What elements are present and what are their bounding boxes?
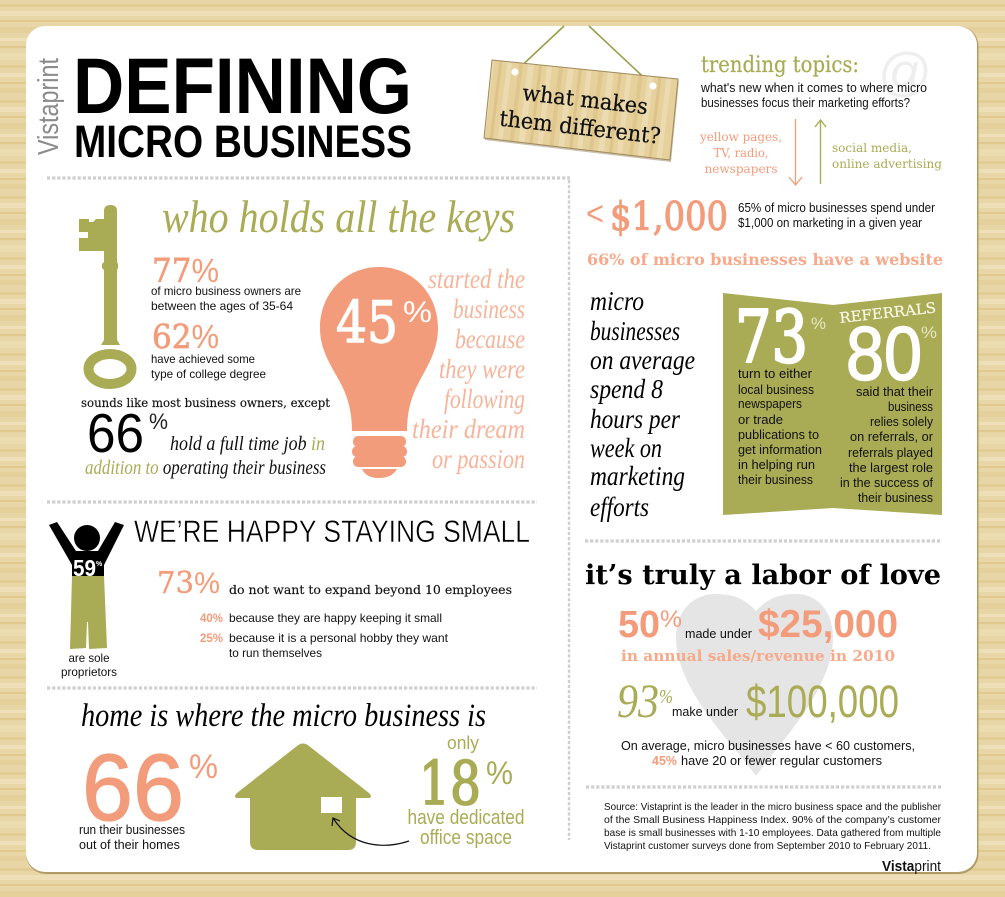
marketing hours script: [590, 286, 695, 522]
dream text: they were: [439, 354, 525, 384]
stat: 50% under $25,000: %: [660, 606, 682, 633]
stat: 73% local papers: in helping run: [738, 458, 815, 472]
stat: 73% local papers: turn to either: [738, 367, 812, 381]
stat: 80% referrals: in the success of: [840, 476, 934, 490]
stat: 66% full time job: hold a full time job in: [170, 433, 325, 455]
arrow: to office window: [332, 818, 409, 845]
stat: 66% full time job: 66: [87, 402, 144, 464]
stat: under $1,000: $1,000 on marketing in a given year: [738, 216, 922, 230]
stat: 50% under $25,000: in annual sales/revenue in 2010: [621, 647, 895, 665]
dream text: business: [453, 294, 525, 324]
stat: under $1,000: <: [586, 195, 604, 233]
icon: person with raised arms: [49, 522, 124, 649]
stat: 80% referrals: their business: [858, 491, 933, 505]
brand: Vistaprint logo: Vistaprint: [882, 858, 942, 875]
heading: it’s truly a labor of love: [585, 560, 941, 591]
stat: 80% referrals: said that their: [856, 385, 933, 399]
stat: 66% full time job: [81, 396, 330, 479]
marketing hours script: hours per: [590, 404, 680, 434]
panel: who holds all the keys: [79, 191, 525, 479]
icon: person with raised arms: %: [96, 561, 103, 568]
marketing hours script: on average: [590, 345, 695, 375]
stat: 73% local papers: get information: [738, 443, 822, 457]
declining channels: newspapers: [704, 162, 778, 176]
stat: 45%: %: [403, 296, 432, 329]
customers note: have 20 or fewer regular customers: [681, 753, 882, 768]
marketing hours script: spend 8: [590, 374, 663, 404]
stat: 80% referrals: %: [921, 323, 937, 342]
stat: 73%: [157, 566, 512, 601]
reason: 25%: to run themselves: [229, 646, 322, 660]
stat: 62%: type of college degree: [151, 367, 266, 381]
reason: 40%: because they are happy keeping it small: [229, 611, 442, 625]
caption: sole proprietors: are sole: [68, 651, 110, 665]
stat: 77%: of micro business owners are: [151, 284, 301, 298]
declining channels: [699, 130, 782, 176]
icon: heart: [676, 594, 833, 776]
stat: 50% under $25,000: [618, 603, 898, 665]
stat: 73% local papers: 73: [735, 295, 808, 379]
arrow: down: [789, 119, 802, 185]
stat: 93% under $100,000: %: [659, 686, 673, 708]
title: DEFINING: DEFINING: [73, 41, 412, 130]
dream text: [412, 264, 525, 474]
stat: 73% local papers: [735, 295, 826, 487]
icon: at sign: @: [878, 43, 932, 102]
growing channels: online advertising: [832, 157, 942, 171]
stat: 73% local papers: their business: [738, 473, 813, 487]
stat: 18%: [408, 733, 524, 849]
stat: 50% under $25,000: 50: [618, 604, 660, 646]
source note: Source: Vistaprint is the leader in the micro business space and the publisher: [604, 801, 941, 813]
stat: 62%: 62%: [152, 317, 219, 356]
stat: 18%: 18: [419, 749, 481, 819]
stat: 62%: have achieved some: [151, 352, 255, 366]
reason: 40%: 40%: [200, 613, 223, 625]
arrow: up: [815, 120, 826, 184]
marketing hours script: businesses: [590, 316, 680, 346]
stat: 73% local papers: %: [811, 314, 826, 333]
sign text: what makes: [521, 81, 649, 120]
stat: 80% referrals: REFERRALS: [839, 300, 937, 327]
panel: labor of love: [585, 560, 941, 776]
stat: 18%: %: [486, 755, 513, 791]
stat: 93% under $100,000: make under: [672, 704, 739, 719]
stat: 18%: only: [447, 733, 479, 753]
title block: [33, 41, 412, 167]
declining channels: yellow pages,: [699, 130, 782, 144]
dream text: or passion: [432, 444, 525, 474]
title: MICRO BUSINESS: MICRO BUSINESS: [74, 116, 412, 167]
sign text: them different?: [498, 107, 662, 150]
customers note: 45%: [652, 753, 677, 768]
trending description: businesses focus their marketing efforts?: [701, 96, 910, 110]
stat: 80% referrals: relies solely: [870, 415, 934, 429]
stat: 80% referrals: [839, 300, 937, 505]
customers note: [621, 738, 915, 768]
stat: 80% referrals: the largest role: [849, 461, 933, 475]
stat: 66% full time job: sounds like most business owners, except: [81, 396, 330, 410]
source note: of the Small Business Happiness Index. 90% of the company’s customer: [604, 814, 941, 826]
trending description: [700, 81, 927, 110]
dream text: because: [455, 324, 525, 354]
reason: 25%: because it is a personal hobby they want: [229, 631, 449, 645]
stat: 80% referrals: on referrals, or: [850, 430, 933, 444]
customers note: On average, micro businesses have < 60 customers,: [621, 738, 915, 753]
stat: 93% under $100,000: 93: [617, 675, 659, 728]
green folded banner: [723, 293, 942, 515]
stat: 50% under $25,000: made under: [685, 626, 753, 641]
source note: base is small businesses with 1-10 employees. Data gathered from multiple: [604, 827, 941, 839]
trending topics: [699, 43, 942, 185]
dream text: following: [444, 384, 525, 414]
caption: sole proprietors: [61, 651, 117, 679]
hanging wooden sign: [484, 26, 679, 162]
stat: 66% at home: 66: [82, 735, 184, 841]
stat: 73%: do not want to expand beyond 10 employees: [229, 583, 512, 597]
stat: 80% referrals: business: [888, 400, 933, 414]
caption: sole proprietors: proprietors: [61, 665, 117, 679]
sign text: [498, 79, 665, 150]
dream text: started the: [428, 264, 525, 294]
source note: Vistaprint customer surveys done from September 2010 to February 2011.: [604, 840, 931, 852]
reason: 25%: [200, 631, 449, 660]
dream text: their dream: [412, 414, 525, 444]
heading: trending topics: trending topics:: [701, 53, 859, 78]
stat: 80% referrals: referrals played: [848, 446, 933, 460]
declining channels: TV, radio,: [714, 146, 768, 160]
stat: 66% at home: %: [189, 748, 218, 786]
stat: 66% at home: [79, 735, 218, 852]
stat: 77%: [151, 251, 301, 313]
stat: 73% local papers: or trade: [738, 413, 783, 427]
stat: 73% local papers: local business: [738, 383, 814, 397]
panel: home is where the micro business is: [79, 698, 524, 852]
reason: 25%: 25%: [200, 633, 223, 645]
growing channels: social media,: [832, 141, 912, 155]
marketing hours script: marketing: [590, 461, 685, 491]
panel: we're happy staying small: [49, 513, 530, 679]
stat: 18%: office space: [420, 827, 512, 849]
heading: WE’RE HAPPY STAYING SMALL: [134, 513, 530, 549]
stat: 66% full time job: addition to operating their business: [85, 457, 326, 479]
stat: 93% under $100,000: $100,000: [746, 676, 899, 727]
stat: 62%: [151, 317, 266, 381]
stat: 77%: 77%: [152, 251, 219, 290]
trending description: what's new when it comes to where micro: [700, 81, 927, 95]
source note: [604, 801, 941, 852]
marketing hours script: week on: [590, 433, 662, 463]
stat: under $1,000: $1,000: [610, 195, 728, 240]
icon: person with raised arms: 59: [73, 555, 96, 581]
icon: key: [79, 205, 132, 384]
stat: website: 66% of micro businesses have a website: [587, 250, 943, 269]
stat: under $1,000: [586, 195, 935, 240]
stat: 73% local papers: newspapers: [738, 397, 802, 411]
stat: 80% referrals: 80: [846, 312, 922, 397]
stat: 50% under $25,000: $25,000: [758, 603, 898, 646]
stat: under $1,000: 65% of micro businesses spend under: [738, 201, 935, 215]
stat: 93% under $100,000: [617, 675, 899, 728]
heading: home is where the micro business is: [81, 698, 486, 734]
marketing hours script: micro: [590, 286, 644, 316]
stat: 18%: have dedicated: [408, 807, 524, 829]
stat: 66% full time job: %: [149, 409, 168, 434]
marketing hours script: efforts: [590, 492, 649, 522]
stat: 77%: between the ages of 35-64: [151, 299, 293, 313]
stat: 73% local papers: publications to: [738, 428, 819, 442]
stat: 66% at home: run their businesses: [79, 823, 185, 837]
stat: 45%: 45: [336, 290, 398, 356]
icon: house: [235, 744, 371, 850]
growing channels: [832, 141, 942, 171]
stat: 66% at home: out of their homes: [79, 838, 180, 852]
heading: who holds all the keys: [162, 191, 515, 242]
stat: 73%: 73%: [157, 566, 220, 601]
icon: light bulb: [320, 267, 438, 478]
brand: Vistaprint vertical: Vistaprint: [33, 58, 65, 155]
